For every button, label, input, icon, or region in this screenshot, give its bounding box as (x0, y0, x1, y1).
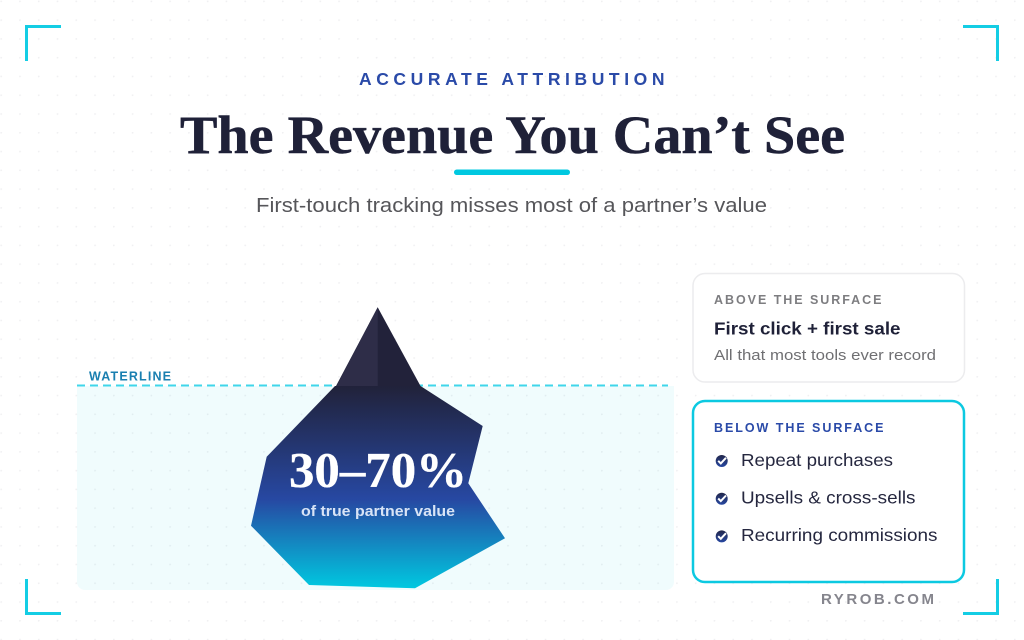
title: The Revenue You Can’t See (180, 105, 845, 165)
corner bracket: top left (26, 26, 61, 61)
iceberg body (251, 386, 505, 588)
corner bracket: bottom left (26, 579, 61, 614)
statistic caption: of true partner value (301, 503, 455, 520)
title underline (454, 170, 570, 175)
card heading: First click + first sale (714, 318, 901, 338)
list item: upsells and cross-sells: Upsells & cross-sells (741, 488, 916, 508)
statistic: 30–70% (289, 442, 467, 498)
panel: above the surface (693, 274, 964, 382)
panel: iceberg diagram (77, 307, 674, 590)
subtitle: First-touch tracking misses most of a partner’s value (256, 195, 767, 217)
card frame (693, 274, 964, 382)
panel: below the surface (693, 401, 964, 582)
card label: ABOVE THE SURFACE (714, 293, 882, 307)
list item: repeat purchases: Repeat purchases (741, 450, 893, 470)
card note: All that most tools ever record (714, 347, 936, 364)
card frame (693, 401, 964, 582)
eyebrow: ACCURATE ATTRIBUTION (359, 69, 664, 89)
water area (77, 386, 674, 590)
list item: recurring commissions: Recurring commissions (741, 525, 938, 545)
corner bracket: bottom right (963, 579, 998, 614)
waterline label: WATERLINE (89, 370, 171, 384)
card label: BELOW THE SURFACE (714, 421, 884, 435)
iceberg tip (336, 307, 420, 386)
corner bracket: top right (963, 26, 998, 61)
brand footer: RYROB.COM (821, 591, 934, 608)
waterline dashed line (77, 384, 668, 386)
header (180, 69, 845, 217)
